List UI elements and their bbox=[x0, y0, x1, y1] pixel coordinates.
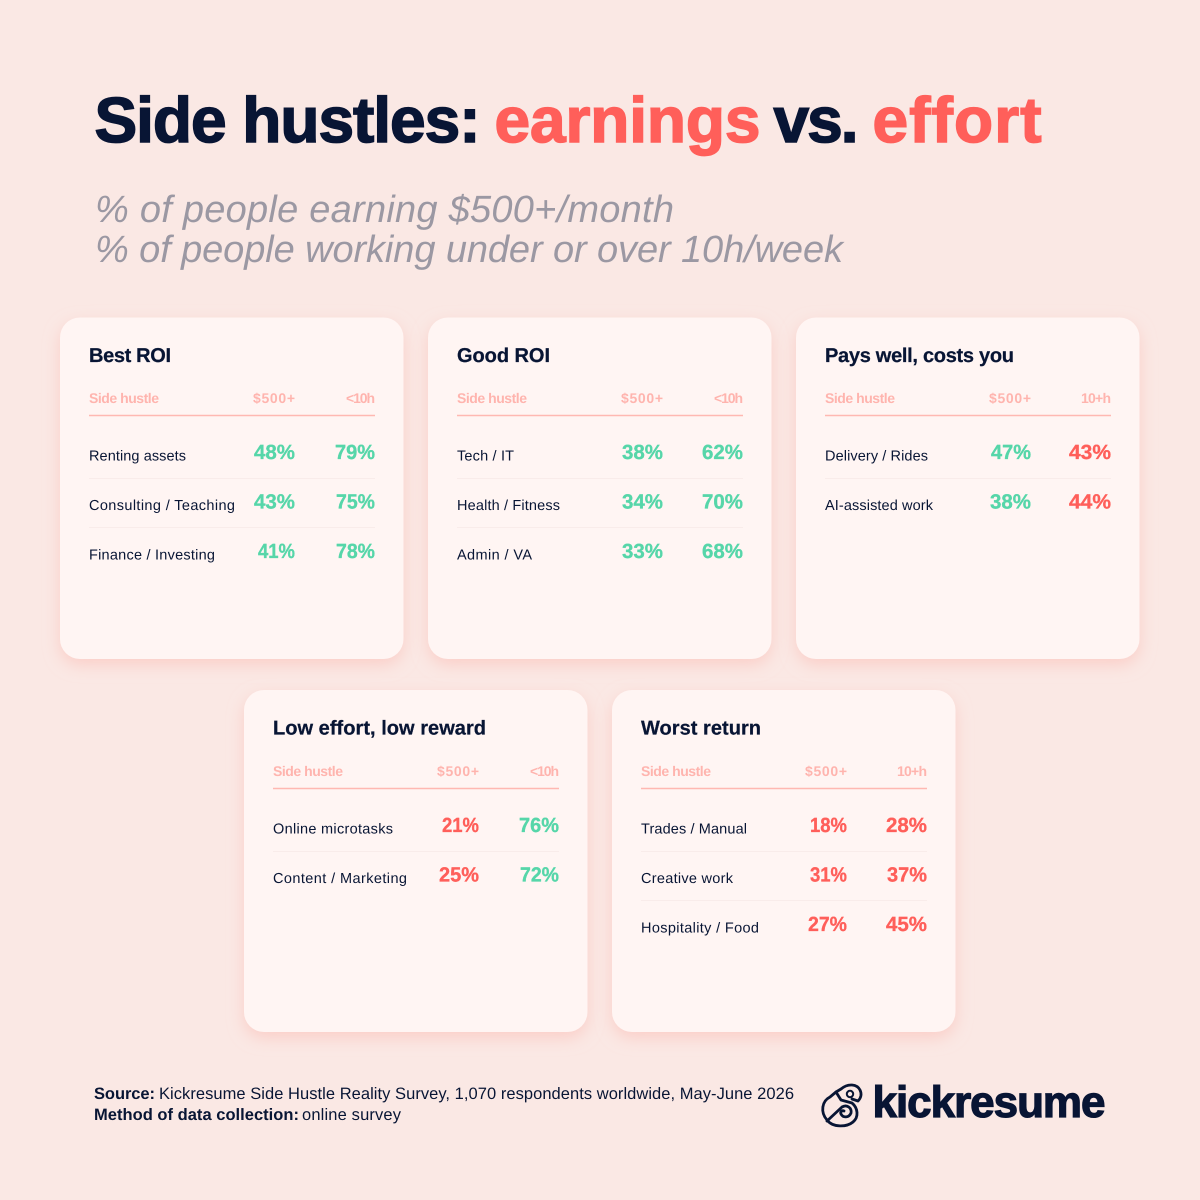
source note: Source: bbox=[94, 1085, 155, 1103]
panel: Pays well, costs you: Pays well, costs you bbox=[825, 345, 1014, 367]
panel: Worst return: 31% bbox=[810, 864, 847, 886]
panel: Worst return: 18% bbox=[810, 814, 847, 837]
panel: Low effort, low reward: Content / Marketing bbox=[273, 871, 407, 887]
panel: Best ROI: Consulting / Teaching bbox=[89, 498, 235, 514]
subtitle bbox=[95, 189, 845, 271]
panel: Good ROI: <10h bbox=[714, 390, 743, 406]
panel: Best ROI: Renting assets bbox=[89, 448, 186, 464]
panel: Pays well, costs you: Side hustle bbox=[825, 390, 895, 406]
panel: Low effort, low reward: 72% bbox=[520, 864, 559, 886]
panel: Pays well, costs you: AI-assisted work bbox=[825, 498, 934, 514]
panel: Worst return: Trades / Manual bbox=[641, 822, 747, 838]
logo wordmark: kickresume bbox=[872, 1078, 1106, 1127]
panel: Good ROI: Good ROI bbox=[457, 345, 550, 367]
panel: Best ROI: Side hustle bbox=[89, 390, 159, 406]
panel: Good ROI: 38% bbox=[622, 441, 663, 464]
panel: Good ROI: 33% bbox=[622, 540, 663, 563]
panel: Worst return: 28% bbox=[886, 814, 927, 837]
panel: Good ROI bbox=[428, 318, 772, 659]
panel: Worst return: Creative work bbox=[641, 871, 734, 887]
title bbox=[94, 84, 1042, 156]
panel: Pays well, costs you: Delivery / Rides bbox=[825, 448, 928, 464]
panel: Best ROI: 43% bbox=[254, 490, 295, 514]
panel: Worst return bbox=[612, 690, 956, 1032]
panel: Pays well, costs you: 43% bbox=[1069, 441, 1111, 464]
panel: Good ROI: 34% bbox=[622, 490, 663, 514]
panel: Good ROI: 62% bbox=[702, 441, 743, 464]
panel: Low effort, low reward: 25% bbox=[439, 864, 479, 886]
panel: Good ROI: Admin / VA bbox=[457, 548, 532, 564]
panel: Low effort, low reward: Side hustle bbox=[273, 763, 343, 779]
panel: Best ROI: 79% bbox=[335, 441, 375, 464]
source note: Kickresume Side Hustle Reality Survey, 1,070 respondents worldwide, May-June 2026 bbox=[159, 1085, 794, 1103]
title: earnings bbox=[494, 84, 760, 156]
subtitle: % of people working under or over 10h/week bbox=[95, 229, 845, 271]
panel: Best ROI: 48% bbox=[254, 441, 295, 464]
panel: Pays well, costs you: 38% bbox=[990, 490, 1031, 514]
panel: Pays well, costs you: 47% bbox=[991, 441, 1031, 464]
panel: Pays well, costs you bbox=[796, 318, 1140, 659]
panel: Worst return: Hospitality / Food bbox=[641, 920, 759, 936]
panel: Good ROI: $500+ bbox=[621, 390, 663, 406]
panel: Pays well, costs you: 10+h bbox=[1081, 390, 1111, 406]
panel: Best ROI bbox=[60, 318, 404, 659]
panel: Low effort, low reward: $500+ bbox=[437, 763, 479, 779]
panel: Low effort, low reward: 21% bbox=[442, 814, 479, 837]
source note bbox=[94, 1085, 794, 1124]
title: vs. bbox=[774, 84, 858, 156]
panel: Worst return: Side hustle bbox=[641, 763, 711, 779]
panel: Good ROI: 68% bbox=[702, 540, 743, 563]
source note: Method of data collection: bbox=[94, 1106, 299, 1124]
panel: Good ROI: Health / Fitness bbox=[457, 498, 560, 514]
title: effort bbox=[872, 84, 1042, 156]
panel: Worst return: 10+h bbox=[897, 763, 927, 779]
panel: Low effort, low reward: <10h bbox=[530, 763, 559, 779]
panel: Good ROI: Side hustle bbox=[457, 390, 527, 406]
panel: Low effort, low reward bbox=[244, 690, 588, 1032]
panel: Low effort, low reward: Online microtasks bbox=[273, 822, 393, 838]
panel: Pays well, costs you: 44% bbox=[1069, 490, 1111, 514]
panel: Good ROI: 70% bbox=[702, 490, 743, 514]
panel: Low effort, low reward: Low effort, low reward bbox=[273, 718, 486, 740]
panel: Worst return: Worst return bbox=[641, 718, 761, 740]
panel: Worst return: 27% bbox=[808, 913, 847, 936]
icon: chameleon logo bbox=[823, 1085, 861, 1126]
panel: Worst return: 45% bbox=[886, 913, 927, 936]
panel: Worst return: $500+ bbox=[805, 763, 847, 779]
panel: Best ROI: 75% bbox=[336, 490, 375, 514]
panel: Best ROI: <10h bbox=[346, 390, 375, 406]
panel: Best ROI: Best ROI bbox=[89, 345, 171, 367]
panel: Best ROI: 78% bbox=[336, 540, 375, 563]
title: Side hustles: bbox=[94, 84, 480, 156]
panel: Pays well, costs you: $500+ bbox=[989, 390, 1031, 406]
subtitle: % of people earning $500+/month bbox=[95, 189, 674, 231]
panel: Best ROI: $500+ bbox=[253, 390, 295, 406]
source note: online survey bbox=[302, 1106, 402, 1124]
panel: Good ROI: Tech / IT bbox=[457, 448, 514, 464]
panel: Best ROI: 41% bbox=[258, 540, 295, 563]
panel: Low effort, low reward: 76% bbox=[519, 814, 559, 837]
panel: Best ROI: Finance / Investing bbox=[89, 548, 215, 564]
panel: Worst return: 37% bbox=[887, 864, 927, 886]
